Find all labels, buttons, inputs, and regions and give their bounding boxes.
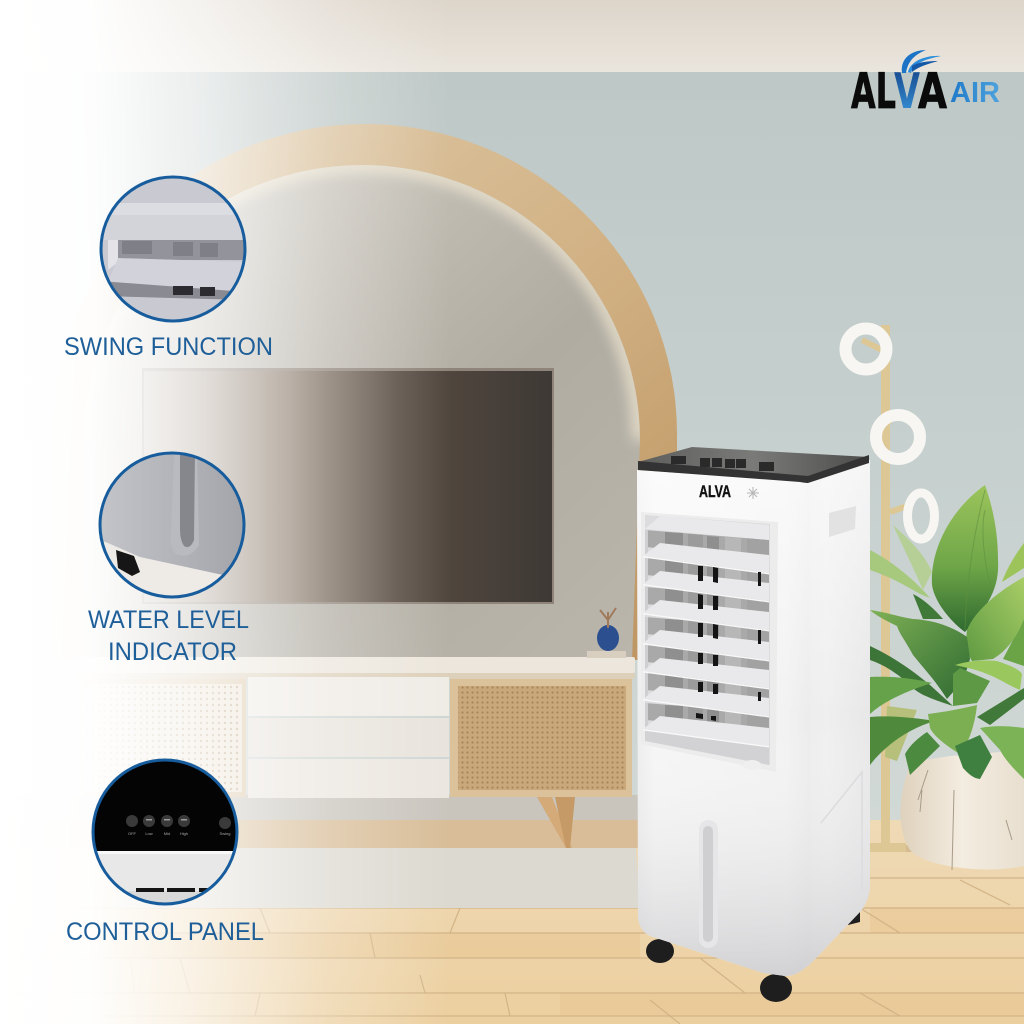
plant leaves: [870, 485, 1024, 779]
swing lens: [100, 176, 246, 322]
swing function callout: [64, 176, 273, 361]
control panel lens: OFF: [128, 831, 137, 836]
plant pot: [900, 750, 1024, 870]
casters: [646, 911, 860, 1002]
control panel lens: Mid: [164, 831, 170, 836]
water level indicator callout: [88, 453, 249, 666]
floor: [0, 820, 1024, 1024]
front panel: [637, 470, 812, 976]
TV console: [75, 657, 635, 848]
logo: AIR: [950, 77, 1000, 109]
TV: [142, 368, 554, 604]
grille frame: [641, 512, 778, 772]
control panel label: CONTROL PANEL: [66, 918, 264, 946]
side handle: [829, 506, 856, 537]
swing label: SWING FUNCTION: [64, 333, 273, 361]
control panel lens: Low: [145, 831, 153, 836]
louvers: [643, 516, 769, 770]
top lid: [638, 447, 869, 483]
product brand: ALVA: [699, 482, 731, 501]
control panel callout: [66, 760, 264, 946]
side recess line: [821, 772, 862, 890]
control panel lens: Swing: [220, 831, 230, 836]
snowflake icon: [747, 487, 759, 499]
water level label: INDICATOR: [108, 638, 237, 666]
logo: [851, 50, 1000, 120]
water level label: WATER LEVEL: [88, 606, 249, 634]
coat stand with rings: [846, 325, 934, 852]
side panel: [785, 460, 870, 976]
logo wing: [902, 50, 941, 73]
logo wordmark: AL: [851, 63, 896, 120]
logo wordmark: V: [894, 63, 920, 120]
vase and books: [587, 608, 626, 658]
control panel lens: High: [180, 831, 188, 836]
arch: [150, 124, 677, 660]
product: air cooler: [637, 447, 870, 1002]
control panel lens: [93, 760, 237, 904]
logo wordmark: A: [918, 63, 947, 120]
lower wall strip and floor shadow: [0, 795, 640, 822]
rug: [110, 848, 640, 908]
water level lens: [100, 453, 244, 597]
water level window: [699, 820, 718, 948]
